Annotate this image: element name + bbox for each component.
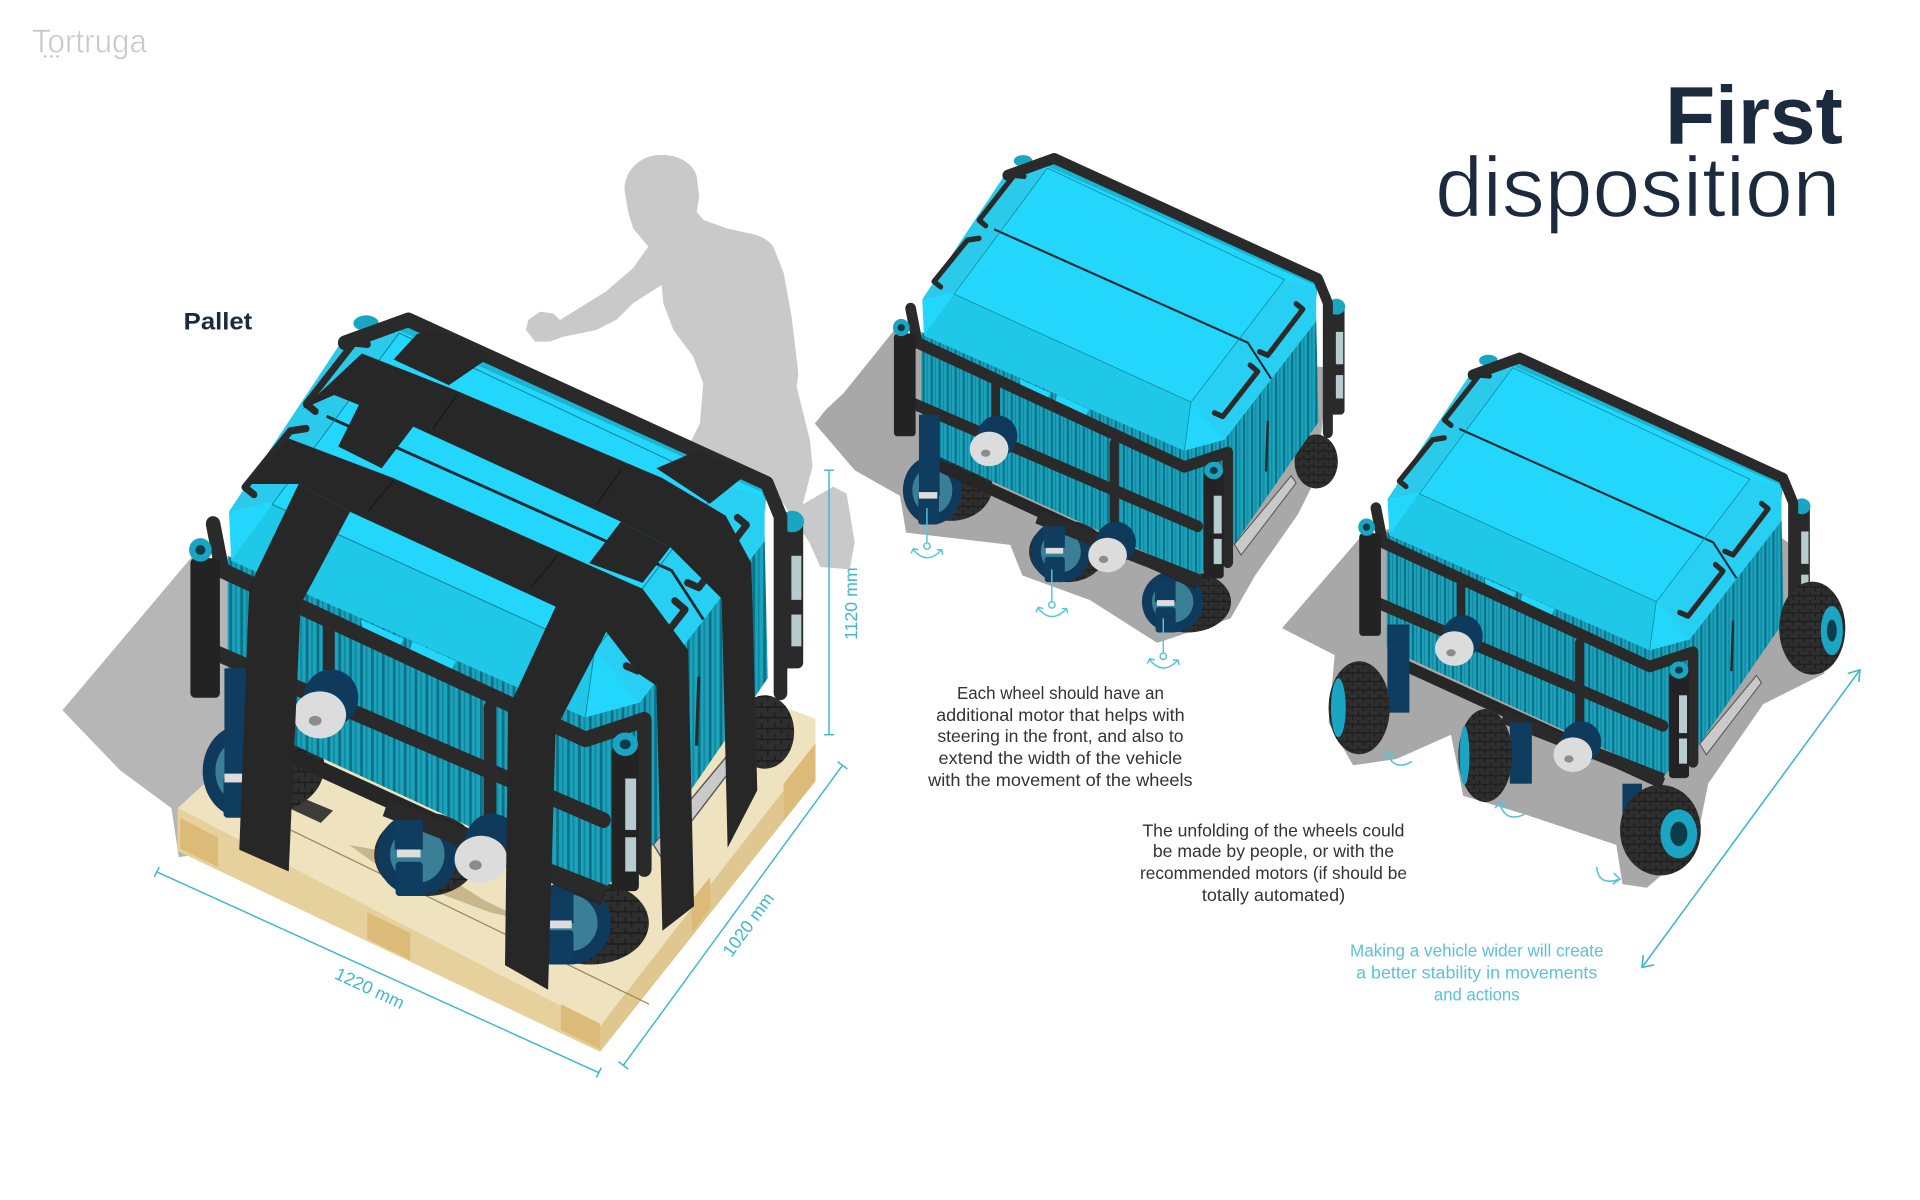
label: Pallet: Pallet — [184, 308, 252, 335]
text: unfolding note — [1140, 820, 1407, 905]
text: stability note: a better stability in movements — [1356, 962, 1597, 982]
title: First — [1665, 70, 1843, 161]
right vehicle shadow — [1282, 490, 1824, 888]
human silhouette for scale — [526, 155, 855, 569]
right vehicle: body — [1358, 355, 1811, 783]
middle vehicle shadow — [815, 331, 1329, 643]
width arrow — [1642, 670, 1860, 967]
dimension: 1120 mm: 1120 mm — [841, 567, 861, 640]
text: unfolding note: be made by people, or with the — [1153, 841, 1394, 861]
strap: front left drop — [239, 484, 350, 871]
middle vehicle: tyres — [903, 434, 1338, 632]
wooden pallet — [178, 686, 816, 1052]
text: steering motor note: with the movement of the wheels — [927, 770, 1193, 790]
strap: top crossing — [394, 332, 492, 385]
strap: back long band — [303, 354, 757, 848]
strap: front right drop — [505, 607, 607, 990]
vehicle on pallet: tyres — [203, 695, 794, 965]
dimension: 1220 mm: 1220 mm — [332, 964, 408, 1013]
text: stability note: Making a vehicle wider will create — [1350, 940, 1604, 960]
text: steering motor note — [927, 683, 1193, 790]
black retaining straps — [239, 332, 757, 990]
title: disposition — [1435, 140, 1840, 236]
steering rotation markers — [911, 508, 1179, 668]
text: unfolding note: The unfolding of the wheels could — [1142, 820, 1404, 840]
strap: near long band — [247, 439, 694, 931]
dimension: 1020 mm: 1020 mm — [718, 889, 778, 960]
strap seams — [368, 395, 621, 587]
text: stability note — [1350, 940, 1604, 1004]
text: steering motor note: extend the width of the vehicle — [939, 748, 1182, 768]
text: steering motor note: steering in the front, and also to — [937, 726, 1184, 746]
logo: Tortruga: Tortruga — [32, 24, 148, 61]
text: unfolding note: recommended motors (if should be — [1140, 863, 1407, 883]
text: unfolding note: totally automated) — [1202, 885, 1345, 905]
title — [1435, 70, 1843, 236]
dimension: 1020 mm — [618, 762, 847, 1069]
vehicle on pallet: body — [189, 315, 804, 965]
unfolding arrows — [1382, 751, 1620, 884]
strap: right crossing — [656, 450, 749, 504]
dimension: 1220 mm — [154, 867, 601, 1078]
pallet cart shadow — [62, 553, 269, 857]
right vehicle: unfolded wheels — [1329, 582, 1845, 876]
text: stability note: and actions — [1434, 984, 1520, 1004]
text: steering motor note: Each wheel should have an — [957, 683, 1164, 703]
strap: right connector — [589, 522, 670, 583]
strap: left connector — [338, 399, 413, 468]
text: steering motor note: additional motor that helps with — [936, 705, 1185, 725]
middle vehicle: body — [893, 155, 1345, 632]
